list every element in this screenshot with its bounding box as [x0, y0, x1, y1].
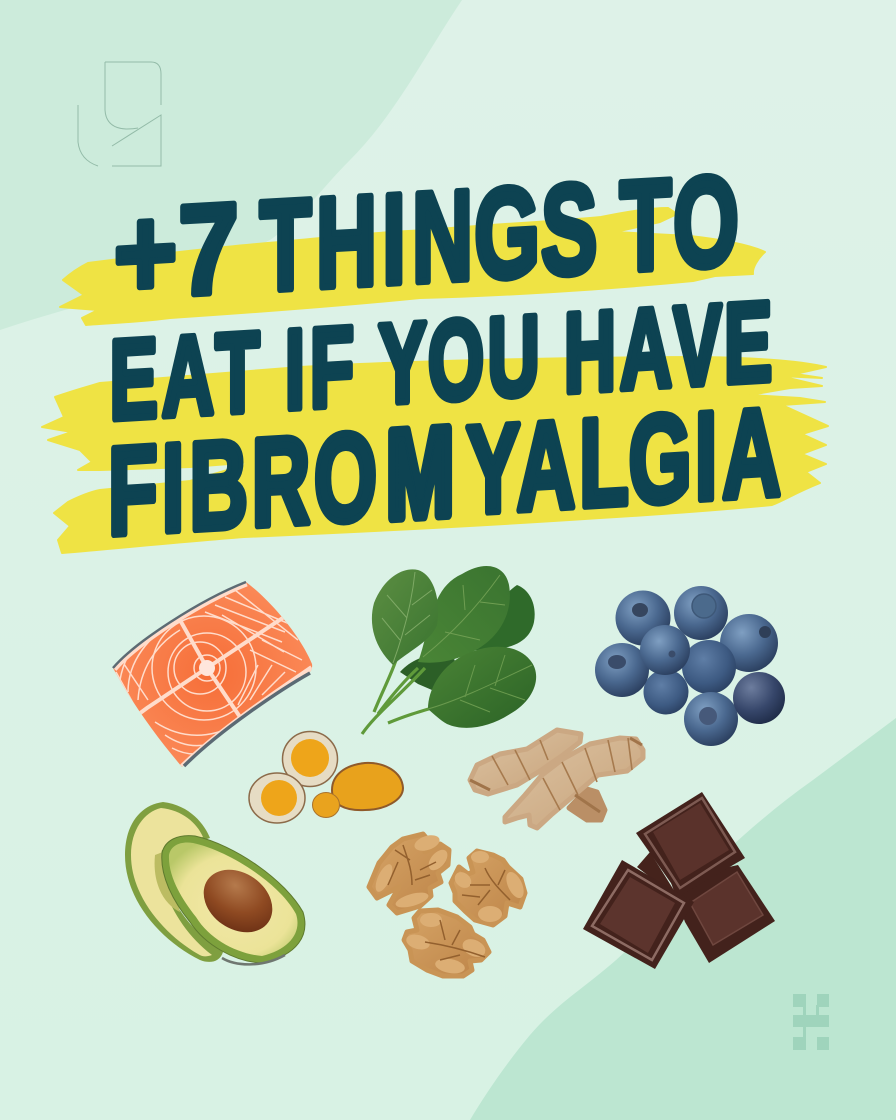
title line 1: [114, 149, 739, 327]
walnut 3: [404, 910, 489, 976]
food: turmeric: [249, 732, 403, 823]
right square: [670, 865, 775, 963]
stems: [362, 660, 432, 734]
title line 2: HAVE: [564, 279, 772, 417]
left leaf: [372, 569, 438, 665]
small piece: [312, 792, 340, 818]
food: salmon fillet: [113, 582, 312, 767]
back half: [125, 802, 223, 962]
round slice 1: [282, 732, 338, 786]
bottom leaf: [428, 647, 536, 728]
avocado pit: [192, 857, 284, 945]
background shape: bottom-right wave: [470, 718, 896, 1120]
title line 3: FIBROMYALGIA: [108, 383, 781, 562]
title line 2: EAT: [110, 309, 260, 444]
food: ginger root: [470, 730, 643, 828]
title line 2: YOU: [378, 292, 540, 428]
front half: [162, 836, 305, 964]
big slice: [332, 763, 403, 810]
title line 2: IF: [285, 304, 354, 434]
back leaf: [470, 585, 535, 650]
ginger piece 1: [470, 730, 581, 794]
dark leaf underneath: [400, 655, 455, 690]
walnut 1: [369, 832, 451, 913]
walnut 2: [451, 851, 527, 925]
logo outline: top left: [78, 62, 161, 166]
background shape: top-left wave: [0, 0, 462, 330]
title line 1: TO: [620, 149, 739, 298]
title: [108, 149, 781, 562]
title line 1: THINGS: [260, 156, 597, 318]
ginger piece 2: [505, 738, 643, 828]
food: blueberries: [595, 586, 785, 746]
food: dark chocolate squares: [583, 792, 775, 969]
logo mark: bottom right: [793, 994, 829, 1050]
food: avocado halves: [125, 802, 305, 964]
top square: [636, 792, 745, 896]
food: spinach leaves: [362, 566, 536, 734]
ginger piece 3: [569, 789, 605, 820]
back piece: [637, 852, 680, 900]
title line 1: +7: [114, 176, 239, 327]
upper middle leaf: [418, 566, 510, 663]
round slice 2: [249, 773, 305, 823]
yellow brush: behind second and third title lines: [42, 357, 828, 553]
title line 2: [110, 279, 772, 444]
food: walnuts: [369, 832, 527, 976]
left square: [583, 860, 694, 969]
yellow brush: behind first title line: [60, 208, 765, 325]
